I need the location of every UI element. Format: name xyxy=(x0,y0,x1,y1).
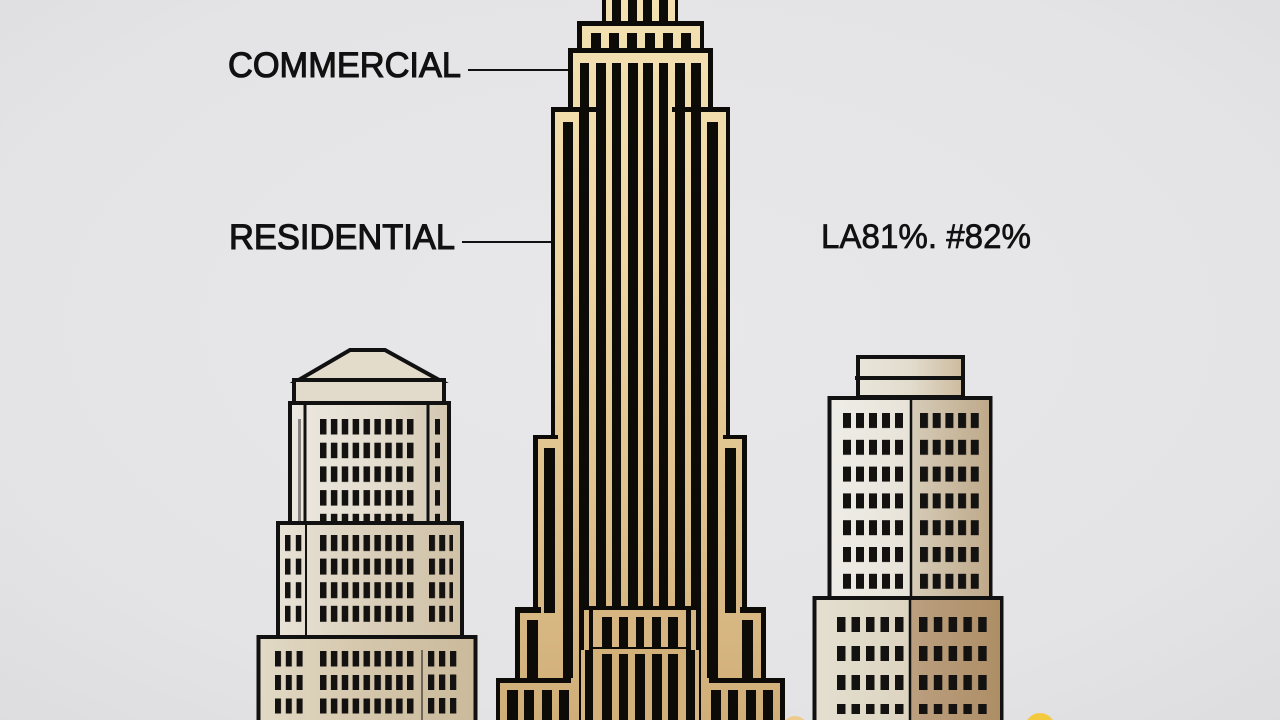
central skyscraper xyxy=(496,0,785,720)
right building cap xyxy=(855,357,965,397)
left building middle tier xyxy=(278,523,462,637)
left building roof xyxy=(297,350,441,381)
decorative coin: pale gold xyxy=(782,716,808,720)
right building upper tier xyxy=(830,398,990,598)
left building xyxy=(258,350,476,720)
left building roof band xyxy=(294,380,444,403)
tower ledges xyxy=(496,21,785,683)
left building upper tier xyxy=(290,403,449,523)
label: residential: RESIDENTIAL xyxy=(229,218,455,257)
tower gold facade xyxy=(500,0,780,720)
left building base tier xyxy=(258,637,476,720)
label: percentages: LA81%. #82% xyxy=(821,218,1031,256)
leader line: commercial xyxy=(468,69,568,71)
right building xyxy=(814,357,1002,720)
tower silhouette xyxy=(496,0,785,720)
decorative coin: yellow xyxy=(1025,713,1055,720)
tower entrance xyxy=(579,606,701,720)
label: commercial: COMMERCIAL xyxy=(228,46,461,85)
right building lower tier xyxy=(814,598,1002,720)
tower stripes xyxy=(507,0,773,720)
leader line: residential xyxy=(462,241,551,243)
